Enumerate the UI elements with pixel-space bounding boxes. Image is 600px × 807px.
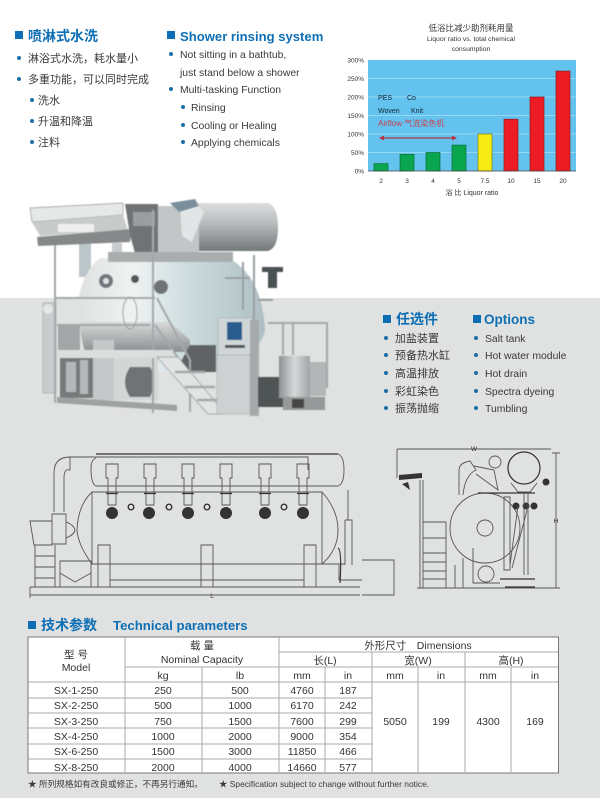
list: chinese features: 注料	[38, 135, 60, 149]
main vessel	[77, 492, 338, 564]
list: options chinese	[384, 332, 450, 415]
data rows: 9000	[290, 731, 314, 743]
chart title: Liquor ratio vs. total chemical	[427, 36, 515, 43]
rings	[128, 504, 287, 510]
data rows: SX-4-250	[54, 731, 98, 743]
list: english features: Applying chemicals	[191, 138, 280, 149]
pump	[258, 377, 283, 407]
chart: liquor ratio vs chemical consumption	[347, 23, 576, 197]
control cabinet	[218, 318, 252, 355]
x axis: 10	[507, 178, 515, 185]
pipework at top	[157, 206, 199, 252]
x axis: 20	[559, 178, 567, 185]
data rows: 354	[339, 731, 357, 743]
upper pipe and tank	[91, 454, 344, 486]
list: english features: Multi-tasking Function	[180, 85, 281, 96]
x axis: 浴 比 Liquor ratio	[446, 188, 499, 197]
stairs	[157, 357, 222, 414]
x axis: 5	[457, 178, 461, 185]
list: english features: Rinsing	[191, 103, 226, 114]
data rows: 187	[339, 685, 357, 697]
valve block	[125, 204, 158, 253]
header cells: 宽(W)	[404, 654, 432, 667]
header cells: in	[531, 670, 539, 682]
list: chinese features: 洗水	[38, 94, 60, 107]
data rows: SX-6-250	[54, 746, 98, 758]
right tower	[339, 490, 362, 580]
list: chinese features	[17, 52, 149, 149]
y axis labels: 200%	[347, 94, 364, 102]
list: options english: Hot water module	[485, 351, 567, 362]
y axis labels: 100%	[347, 132, 364, 138]
frame and handrail	[55, 210, 190, 413]
list: options chinese: 高温排放	[395, 366, 439, 380]
header drum	[195, 203, 278, 251]
y axis labels	[347, 58, 364, 176]
data rows: 5050	[383, 716, 407, 728]
vessel ports	[99, 274, 113, 288]
panel: shower rinsing chinese	[15, 28, 149, 149]
list: options english	[474, 334, 567, 415]
chart annotations: Woven	[378, 108, 400, 115]
data rows: 11850	[288, 746, 316, 758]
data rows: 242	[339, 700, 357, 712]
y axis labels: 0%	[355, 168, 364, 176]
table heading: 技术参数	[41, 617, 97, 633]
ladder	[420, 480, 446, 588]
chart title	[427, 23, 515, 53]
header cells: mm	[386, 670, 404, 682]
chart annotations: PES	[378, 95, 392, 102]
lower machinery	[58, 326, 80, 356]
plot area	[368, 60, 576, 171]
bars	[374, 71, 570, 171]
data rows: 466	[339, 746, 357, 758]
right tank	[362, 560, 394, 595]
y axis labels: 250%	[347, 76, 364, 83]
header cells	[62, 639, 539, 682]
y axis labels: 300%	[347, 58, 364, 64]
side tanks	[268, 323, 327, 388]
header cells: 长(L)	[313, 655, 337, 667]
data rows: 169	[526, 716, 544, 728]
x axis	[368, 171, 576, 197]
data rows: 2000	[151, 762, 175, 774]
top rack	[30, 203, 123, 222]
left cabinet	[43, 303, 56, 393]
list: options chinese: 加盐装置	[395, 332, 439, 345]
data rows: 7600	[290, 716, 314, 728]
gray background band	[0, 298, 600, 798]
x axis: 15	[533, 178, 541, 185]
list: options chinese: 振荡抛缩	[395, 401, 439, 415]
valve actuator	[262, 267, 283, 288]
nozzles	[106, 464, 309, 505]
panel: shower rinsing english	[167, 29, 323, 149]
data rows: 6170	[290, 700, 314, 712]
data rows	[54, 685, 544, 774]
heading: chinese shower rinsing: 喷淋式水洗	[28, 28, 98, 44]
list: english features	[169, 50, 300, 149]
footnote chinese: ★ 所列规格如有改良或修正，不再另行通知。	[28, 778, 203, 789]
platform	[58, 350, 173, 358]
list: english features: Not sitting in a bathtub,	[180, 50, 286, 61]
tower and struts	[504, 492, 528, 575]
chart annotations: Co	[407, 95, 416, 102]
list: options chinese: 预备热水缸	[395, 348, 450, 362]
wheels	[106, 507, 309, 519]
x axis: 3	[405, 178, 409, 185]
list: options english: Tumbling	[485, 404, 528, 415]
list: chinese features: 升温和降温	[38, 114, 93, 128]
data rows: 750	[154, 716, 172, 728]
side elevation drawing	[30, 454, 394, 600]
trough	[60, 561, 91, 587]
y axis labels: 50%	[351, 150, 364, 157]
data rows: 250	[154, 685, 172, 697]
side elevation drawing: L	[210, 593, 214, 600]
header cells: lb	[236, 670, 244, 682]
data rows: 2000	[228, 731, 252, 743]
legs and base	[30, 545, 360, 587]
dimension L	[30, 587, 360, 598]
list: chinese features: 淋浴式水洗，耗水量小	[28, 52, 138, 65]
data rows: 3000	[228, 746, 252, 758]
data rows: 299	[339, 716, 357, 728]
data rows: 14660	[287, 762, 317, 774]
list: options english: Salt tank	[485, 334, 526, 345]
list: options english: Hot drain	[485, 369, 527, 380]
header cells: kg	[157, 670, 169, 682]
table heading	[28, 617, 248, 633]
y axis labels: 150%	[347, 113, 364, 120]
data rows: SX-1-250	[54, 685, 98, 697]
header cells: 高(H)	[498, 654, 524, 667]
header cells: in	[344, 670, 352, 682]
dimensions	[397, 449, 560, 588]
chart annotations: Knit	[411, 108, 423, 115]
top tank	[508, 452, 540, 484]
data rows: 199	[432, 716, 450, 728]
data rows: 1500	[151, 746, 175, 758]
header cells: 型 号	[64, 648, 88, 661]
data rows: 577	[339, 762, 357, 774]
data rows: SX-2-250	[54, 700, 98, 712]
end elevation drawing: W	[471, 446, 478, 453]
header cells: Model	[62, 662, 90, 674]
data rows: 500	[154, 700, 172, 712]
data rows: 4300	[476, 716, 500, 728]
data rows: 1000	[151, 731, 175, 743]
header cells: mm	[293, 670, 311, 682]
heading: shower rinsing system: Shower rinsing system	[180, 29, 323, 44]
x axis: 7.5	[480, 178, 490, 185]
header cells: mm	[479, 670, 497, 682]
data rows: 4000	[228, 762, 252, 774]
data rows: 500	[231, 685, 249, 697]
base rail	[57, 397, 177, 411]
pipes	[459, 461, 537, 495]
end elevation drawing	[397, 446, 560, 588]
footnote english: ★ Specification subject to change without further notice.	[219, 779, 429, 789]
fan and ladder	[30, 514, 75, 587]
main vessel upper	[78, 258, 265, 372]
panel: options	[383, 311, 567, 415]
header cells: 外形尺寸 Dimensions	[364, 639, 472, 652]
header cells: in	[437, 670, 445, 682]
chart annotations	[378, 95, 457, 140]
chart title: 低浴比减少助剂耗用量	[428, 23, 514, 33]
data rows: 1500	[228, 716, 252, 728]
valve cluster	[399, 473, 550, 510]
list: chinese features: 多重功能，可以同时完成	[28, 72, 149, 86]
data rows: 4760	[290, 685, 314, 697]
header cells: Nominal Capacity	[161, 654, 244, 666]
list: english features: just stand below a shower	[179, 68, 300, 79]
technical parameters table	[28, 637, 558, 774]
header cells: 载 量	[190, 640, 214, 652]
heading: options english: Options	[484, 312, 535, 327]
x axis: 2	[379, 178, 383, 185]
vessel top manifold	[108, 252, 233, 262]
x axis: 4	[431, 178, 435, 185]
lower tank	[478, 566, 494, 582]
data rows: SX-8-250	[54, 762, 98, 774]
machine photo	[30, 199, 327, 416]
chart annotations: Airflow 气流染色机	[378, 118, 444, 128]
main vessel lower band	[80, 322, 190, 352]
heading: options chinese: 任选件	[396, 311, 438, 327]
end elevation drawing: H	[554, 518, 559, 525]
chart title: consumption	[452, 46, 490, 53]
list: options english: Spectra dyeing	[485, 387, 555, 398]
table heading: Technical parameters	[113, 618, 248, 633]
data rows: 1000	[228, 700, 252, 712]
grid lines	[28, 637, 558, 773]
list: options chinese: 彩虹染色	[395, 384, 439, 398]
list: english features: Cooling or Healing	[191, 121, 277, 132]
back columns	[79, 243, 91, 277]
vessel	[450, 493, 520, 563]
data rows: SX-3-250	[54, 716, 98, 728]
